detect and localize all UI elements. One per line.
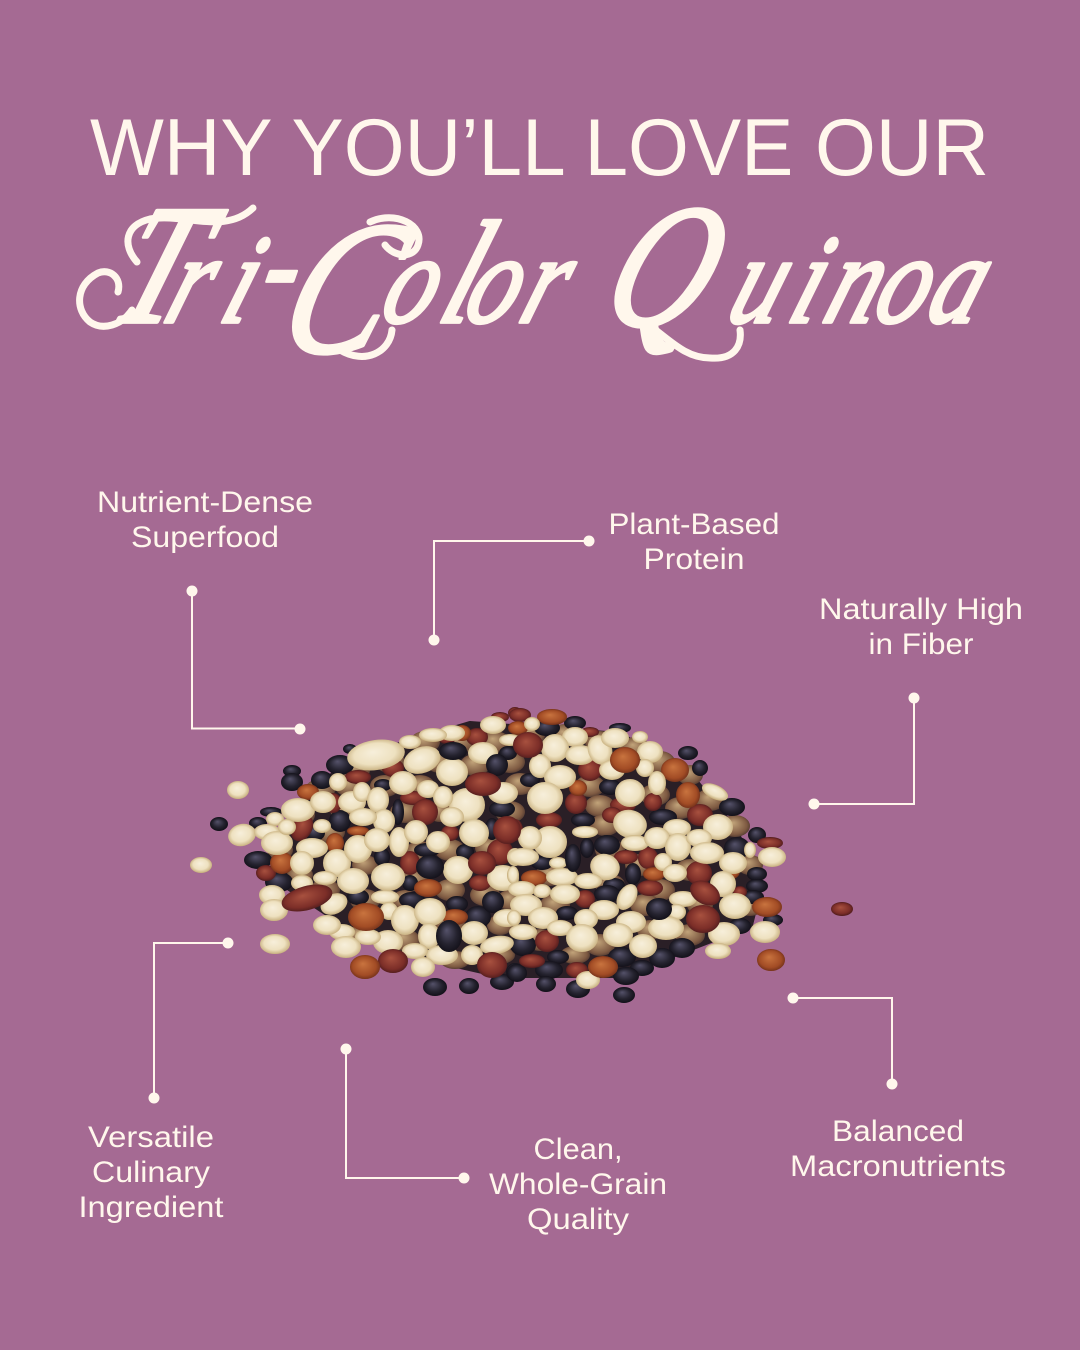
connector: macronutrients — [788, 992, 898, 1090]
label: naturally high in fiber: Naturally High — [819, 593, 1023, 626]
heading: script title: o — [367, 210, 466, 350]
connector: plant-based — [428, 536, 594, 646]
heading: script title: n — [810, 210, 910, 350]
heading: script title: o — [860, 210, 959, 350]
heading: script title: r — [151, 210, 240, 350]
label: balanced macronutrients: Macronutrients — [790, 1150, 1006, 1183]
label: clean whole-grain quality: Whole-Grain — [489, 1168, 667, 1201]
filler grains under the pile — [267, 724, 765, 969]
label: plant-based protein: Protein — [644, 543, 744, 576]
heading: script title: a — [914, 210, 1013, 350]
cream quinoa grains — [191, 717, 785, 988]
label: naturally high in fiber: in Fiber — [868, 628, 974, 661]
label: versatile culinary ingredient: Ingredient — [78, 1191, 224, 1224]
heading: script title: i — [775, 210, 852, 350]
label: nutrient-dense superfood: Superfood — [131, 521, 279, 554]
black quinoa grains — [211, 717, 782, 1002]
label: plant-based protein: Plant-Based — [608, 508, 780, 541]
heading: script title: l — [424, 192, 513, 354]
heading: script title — [80, 169, 1027, 394]
connector: whole-grain — [340, 1044, 470, 1184]
connector: fiber — [808, 692, 920, 810]
orange-brown quinoa grains — [271, 710, 784, 970]
heading: script title: i — [207, 210, 284, 350]
heading: script title: r — [506, 210, 595, 350]
label: balanced macronutrients: Balanced — [832, 1115, 964, 1148]
label: versatile culinary ingredient: Culinary — [92, 1156, 210, 1189]
connector: nutrient-dense — [186, 586, 306, 734]
heading: script title: T — [92, 171, 242, 359]
label: versatile culinary ingredient: Versatile — [88, 1121, 214, 1154]
heading: script title: u — [714, 210, 814, 350]
heading: script title: C — [258, 183, 435, 394]
label: clean whole-grain quality: Clean, — [534, 1133, 622, 1166]
heading: why you'll love our: WHY YOU’LL LOVE OUR — [90, 103, 989, 193]
label: clean whole-grain quality: Quality — [527, 1203, 629, 1236]
dark and red grains resting on top — [280, 733, 723, 978]
heading: script title: o — [450, 210, 550, 350]
heading: script title: - — [245, 194, 327, 334]
heading: script title: Q — [583, 169, 752, 363]
connector: versatile — [148, 938, 234, 1104]
quinoa pile illustration — [191, 708, 852, 1002]
label: nutrient-dense superfood: Nutrient-Dense — [97, 486, 313, 519]
red quinoa grains — [257, 708, 852, 977]
